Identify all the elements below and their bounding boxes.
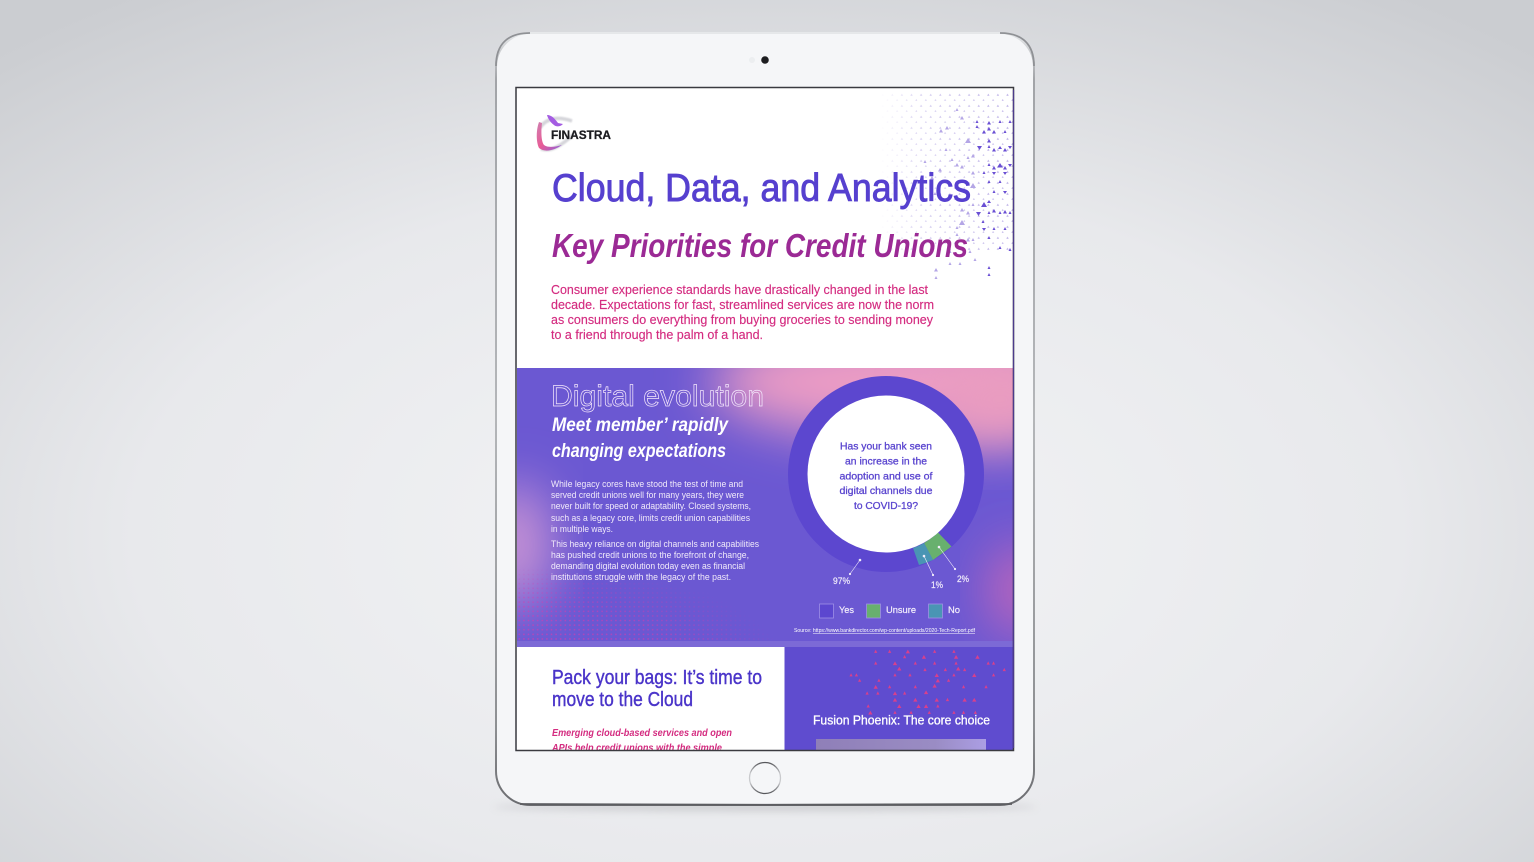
donut question [840, 440, 933, 512]
intro paragraph: as consumers do everything from buying groceries to sending money [551, 313, 934, 327]
segment: no 1% [913, 543, 933, 565]
percentage labels: 1% [931, 580, 943, 591]
leader lines [849, 546, 956, 576]
panel image [816, 739, 986, 750]
percentage labels [833, 575, 969, 588]
intro paragraph: to a friend through the palm of a hand. [551, 328, 763, 342]
panel heading: move to the Cloud [552, 689, 693, 711]
intro paragraph [551, 283, 934, 342]
panel heading: Pack your bags: It’s time to [552, 667, 762, 689]
logo: Finastra [537, 115, 611, 151]
title: Cloud, Data, and Analytics [552, 167, 971, 210]
subtitle: Key Priorities for Credit Unions [552, 227, 968, 264]
body text: has pushed credit unions to the forefront of change, [551, 550, 749, 560]
camera [749, 56, 769, 64]
donut question: to COVID-19? [854, 500, 918, 512]
tablet device [493, 33, 1037, 811]
body text: This heavy reliance on digital channels and capabilities [551, 539, 759, 549]
body text: demanding digital evolution today even as financial [551, 561, 745, 571]
percentage labels: 97% [833, 576, 850, 587]
body text: institutions struggle with the legacy of the past. [551, 572, 731, 582]
panel: digital evolution [517, 368, 1013, 647]
donut question: digital channels due [840, 485, 933, 497]
tablet screen [517, 88, 1013, 750]
body text: in multiple ways. [551, 524, 613, 534]
intro paragraph: Consumer experience standards have drastically changed in the last [551, 283, 929, 297]
panel intro: APIs help credit unions with the simple [551, 742, 722, 754]
panel heading: Fusion Phoenix: The core choice [813, 712, 990, 728]
panel: pack your bags [552, 668, 762, 750]
body text: While legacy cores have stood the test of time and [551, 479, 743, 489]
percentage labels: 2% [957, 574, 969, 585]
body text [551, 479, 759, 582]
legend: Yes [839, 605, 854, 616]
body text: served credit unions well for many years, they were [551, 490, 744, 500]
source note: Source: https://www.bankdirector.com/wp-content/uploads/2020-Tech-Report.pdf [794, 628, 976, 634]
segment: unsure 2% [924, 532, 952, 560]
legend: Unsure [886, 605, 916, 616]
red triangle pattern [849, 650, 1006, 714]
panel background [517, 368, 1013, 647]
screen border [516, 88, 1014, 750]
body text: never built for speed or adaptability. Closed systems, [551, 501, 751, 511]
section subheading [552, 415, 729, 462]
panel intro: Emerging cloud-based services and open [552, 727, 732, 739]
legend [820, 604, 960, 618]
decorative triangle pattern [880, 92, 1013, 279]
section heading: digital evolution: Digital evolution [551, 380, 764, 413]
panel heading [553, 668, 762, 706]
section subheading: Meet member’ rapidly [552, 415, 729, 436]
donut chart [788, 376, 984, 591]
panel intro [552, 728, 732, 750]
panel: fusion phoenix [784, 647, 1014, 750]
legend: No [948, 605, 960, 616]
intro paragraph: decade. Expectations for fast, streamlined services are now the norm [551, 298, 934, 312]
home button [750, 762, 780, 794]
donut question: an increase in the [845, 456, 927, 468]
logo wordmark: FINASTRA [551, 130, 611, 142]
body text: such as a legacy core, limits credit union capabilities [551, 513, 750, 523]
donut question: Has your bank seen [840, 440, 932, 452]
section subheading: changing expectations [552, 441, 726, 462]
donut question: adoption and use of [840, 470, 933, 482]
